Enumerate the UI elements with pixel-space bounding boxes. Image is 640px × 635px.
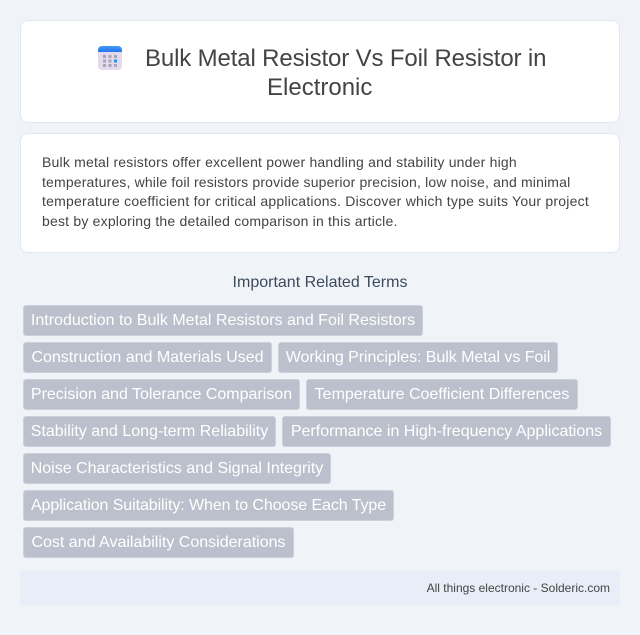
tag	[23, 527, 294, 558]
description panel	[20, 133, 620, 253]
description text: temperature coefficient for critical applications. Discover which type suits Your project	[42, 193, 589, 209]
tag	[23, 305, 423, 336]
footer text: All things electronic - Solderic.com	[427, 581, 610, 595]
title	[145, 45, 546, 101]
tag	[23, 453, 331, 484]
header panel	[20, 20, 620, 123]
tag: Stability and Long-term Reliability	[31, 423, 268, 440]
tag: Temperature Coefficient Differences	[315, 386, 569, 403]
tag	[23, 490, 394, 521]
tag: Construction and Materials Used	[31, 349, 264, 366]
tag: Application Suitability: When to Choose Each Type	[31, 497, 386, 514]
tag: Working Principles: Bulk Metal vs Foil	[286, 349, 550, 366]
title: Bulk Metal Resistor Vs Foil Resistor in	[145, 45, 546, 72]
tag: Cost and Availability Considerations	[31, 534, 286, 551]
tag: Noise Characteristics and Signal Integrity	[31, 460, 323, 477]
description text: Bulk metal resistors offer excellent power handling and stability under high	[42, 154, 517, 170]
tag: Performance in High-frequency Applications	[291, 423, 602, 440]
description text	[42, 154, 589, 229]
title: Electronic	[267, 74, 372, 101]
tag	[278, 342, 558, 373]
footer	[20, 571, 620, 605]
icon: calendar	[98, 46, 122, 70]
section heading: Important Related Terms	[233, 274, 407, 291]
tag	[23, 416, 276, 447]
tag	[23, 379, 300, 410]
tag	[282, 416, 611, 447]
tags	[23, 305, 611, 558]
description text: temperatures, while foil resistors provide superior precision, low noise, and minimal	[42, 174, 570, 190]
tag	[23, 342, 272, 373]
tag	[306, 379, 578, 410]
tag: Precision and Tolerance Comparison	[31, 386, 292, 403]
description text: best by exploring the detailed comparison in this article.	[42, 213, 398, 229]
tag: Introduction to Bulk Metal Resistors and Foil Resistors	[31, 312, 415, 329]
